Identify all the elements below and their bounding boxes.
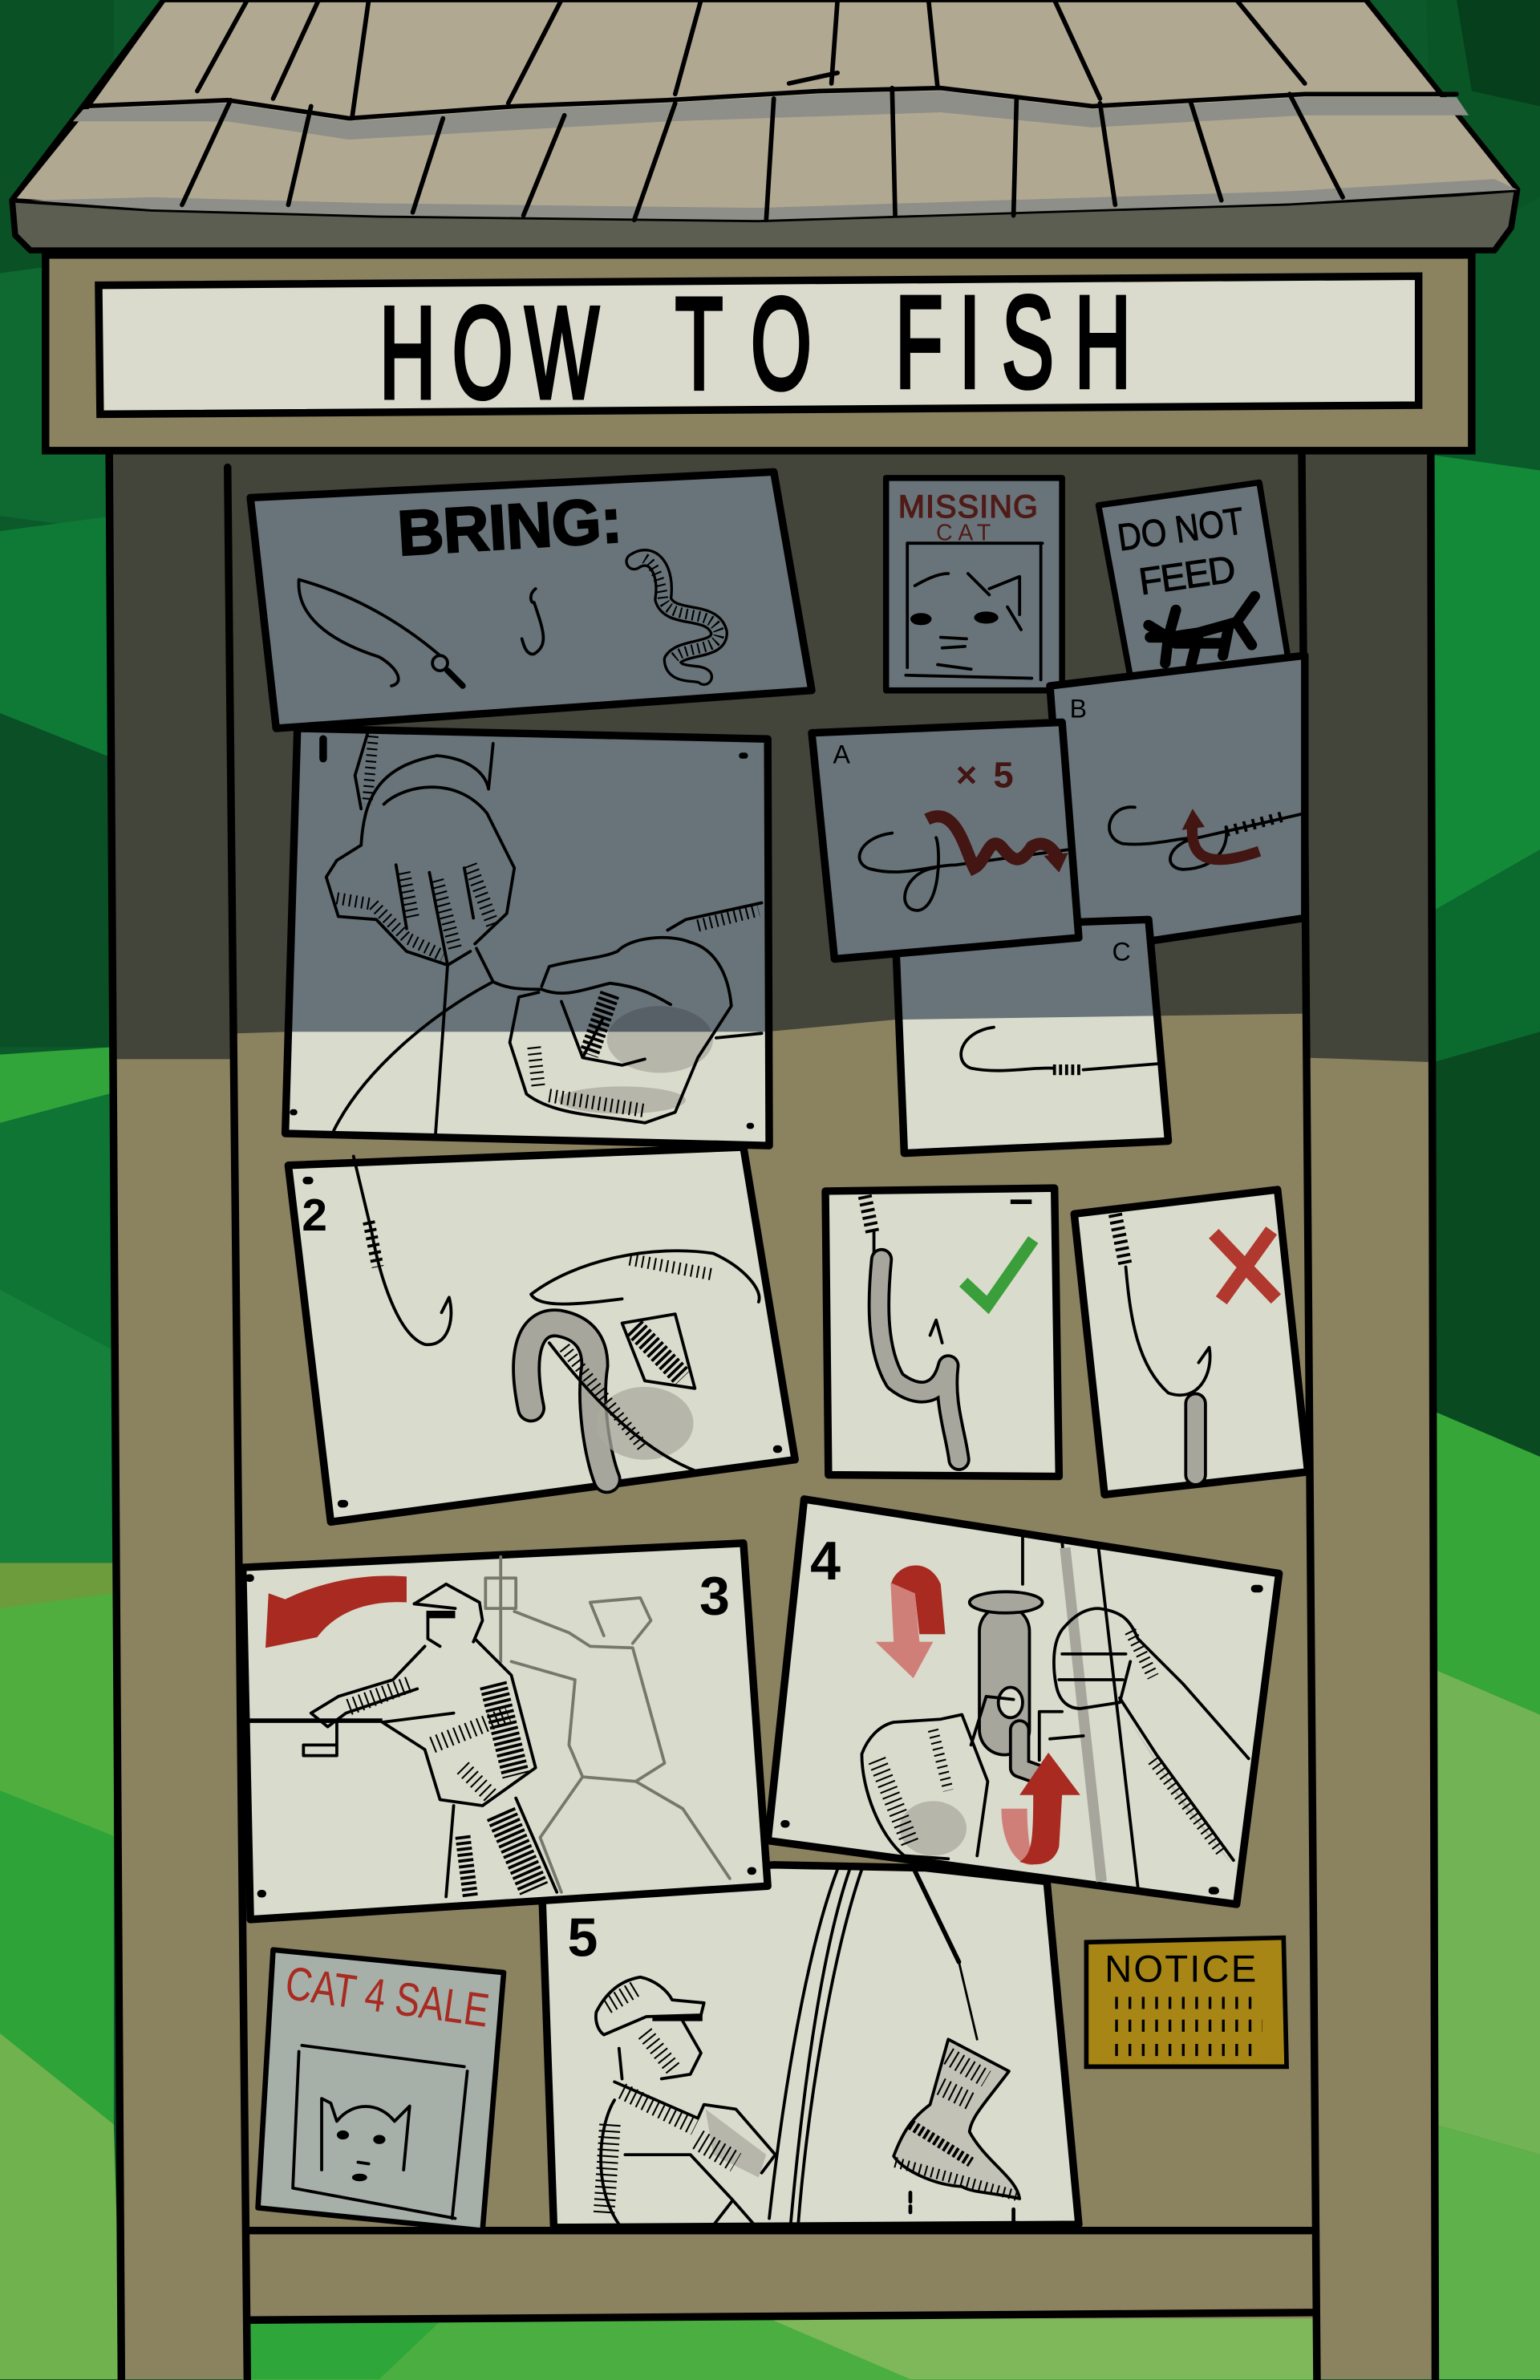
fishing line [959,1962,977,2039]
hook [1126,1267,1210,1395]
worm tube [526,1323,607,1479]
notice body scribbles [1115,2003,1262,2050]
knot [1115,1214,1126,1267]
pins [784,1589,1259,1891]
pins [249,1578,752,1894]
panel: step B [1050,655,1305,953]
title text: fish: FISH [895,270,1131,416]
poster: missing cat [886,478,1062,691]
knot [865,1196,873,1232]
poster: notice [1086,1938,1287,2066]
boot [894,2039,1019,2221]
panel: step A [812,722,1079,959]
coil B [1226,817,1283,832]
red x mark [1214,1231,1276,1300]
poster: cat for sale [258,1950,504,2231]
label A: A [833,740,851,768]
cat portrait [906,543,1043,679]
board posts and backing [109,451,1435,2379]
pin [1011,1201,1031,1203]
lower hand [510,903,762,1123]
panel: step C [895,919,1169,1154]
reel [303,1722,337,1756]
feed text: FEED [1137,548,1238,603]
rod poles [1023,1537,1138,1887]
hook tube [970,1591,1084,1775]
label C: C [1112,937,1131,966]
notice heading: NOTICE [1104,1948,1256,1990]
rod shading [1065,1547,1101,1882]
icon: hook [522,589,543,654]
knot [369,1222,378,1267]
arrow head A [1044,853,1068,873]
hand [531,1251,760,1472]
poster: do not feed [1099,483,1290,677]
roof [12,0,1518,250]
icon: worm [634,557,719,677]
step number 5: 5 [567,1907,598,1968]
step number 2: 2 [302,1190,327,1241]
ghost figure [485,1557,730,1892]
fisherman [596,1977,776,2228]
panel: step 3 casting [243,1543,768,1920]
red arrow B [1192,824,1259,860]
do not text: DO NOT [1115,500,1246,559]
hook line [874,1232,942,1343]
title text: to: TO [675,272,812,416]
step number 4: 4 [810,1531,841,1591]
red arrow up [1001,1753,1080,1865]
hook and line A [860,833,1068,910]
panel: step 4 setting the hook [768,1499,1279,1904]
arrow head B [1182,809,1205,830]
knot coil C [1053,1067,1082,1072]
icon: cat silhouette [1149,596,1254,665]
title sign [99,276,1419,426]
fishing rod [245,1720,383,1722]
lower cross beam [249,2231,1314,2320]
title text: how: HOW [379,281,599,426]
poster: bring list [250,472,812,728]
times five: ×5 [956,755,1014,796]
pins [306,1181,778,1504]
heading: bring: BRING: [395,484,624,569]
hook and knot C [961,1028,1159,1071]
red arrow down [875,1565,945,1678]
panel: correct baiting [825,1188,1059,1477]
icon: fishing rod [298,580,463,686]
lower hand [861,1715,987,1859]
upper hand [326,730,514,965]
bent rod [769,1869,861,2226]
panel: step 2 baiting [288,1147,795,1522]
panel: step 1 tying [286,728,769,1145]
cat label: CAT [936,520,991,545]
rod tip and line [915,1871,959,1962]
pins [293,756,751,1126]
check mark [963,1239,1033,1305]
upper hand and arm [1054,1608,1249,1867]
casting man [311,1584,557,1897]
red arrow [265,1575,407,1648]
header beam [46,255,1472,451]
cat portrait [293,2046,468,2219]
worm [1189,1404,1202,1475]
hook and line B [1109,807,1305,870]
fishing lines [334,948,540,1135]
step number 3: 3 [699,1566,730,1627]
missing heading: MISSING [898,489,1038,525]
top shadow across board [109,451,1434,1062]
cat for sale text: CAT 4 SALE [282,1956,492,2037]
step number 1 [321,739,325,759]
panel: step 5 catch [541,1865,1079,2228]
red wiggle A [927,817,1059,868]
hook [354,1156,451,1344]
label B: B [1070,695,1087,724]
panel: wrong baiting [1074,1190,1308,1494]
worm on hook [879,1259,959,1460]
